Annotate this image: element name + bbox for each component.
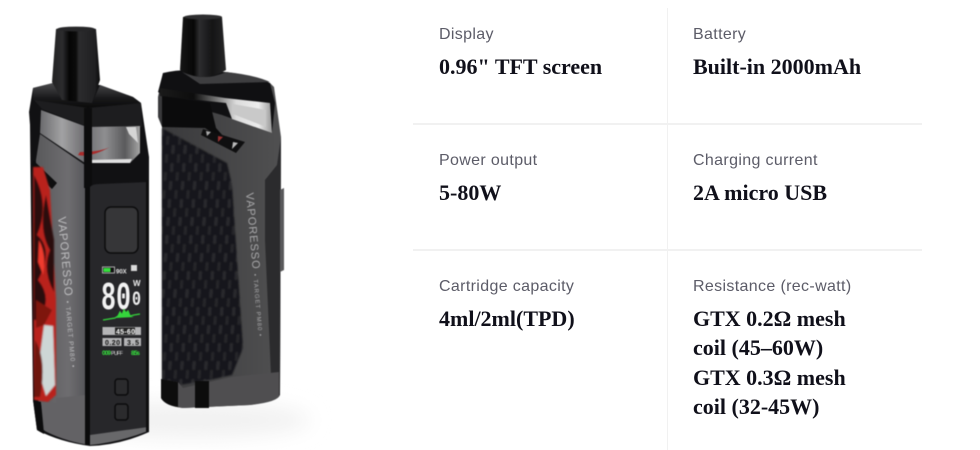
spec: charging current	[693, 152, 827, 205]
front body	[29, 83, 149, 446]
rear base	[161, 372, 279, 408]
rear shoulder	[158, 70, 275, 133]
value	[693, 306, 846, 419]
battery icon	[102, 267, 114, 273]
screen readout: 3.5	[127, 340, 139, 347]
rear carbon panel	[162, 128, 243, 385]
device: front pod with screen	[29, 27, 149, 446]
value: Built-in 2000mAh	[693, 54, 861, 79]
power range bar	[102, 327, 141, 335]
screen readout: W	[133, 279, 141, 288]
rear window	[160, 88, 272, 133]
screen readout: 90X	[116, 270, 127, 276]
product illustration: two pod devices	[28, 14, 294, 447]
screen readout: 0.20	[105, 340, 120, 347]
wattage digits: 80	[101, 277, 131, 322]
front shoulder cap	[33, 83, 141, 108]
value: GTX 0.3Ω mesh	[693, 365, 846, 390]
value: 5-80W	[439, 180, 501, 205]
spec: cartridge capacity	[439, 278, 575, 331]
rear vents	[201, 129, 245, 153]
adjust buttons	[115, 379, 128, 420]
value: GTX 0.2Ω mesh	[693, 306, 846, 331]
screen readout: 45-60	[116, 329, 135, 336]
device: rear pod with carbon panel	[158, 14, 284, 408]
spec: power output	[439, 152, 537, 205]
screen readout: 0	[132, 289, 141, 312]
label: Display	[439, 26, 494, 43]
label: Charging current	[693, 152, 818, 169]
value: coil (45–60W)	[693, 335, 823, 360]
value: 2A micro USB	[693, 180, 827, 205]
screen readout: PUFF	[111, 351, 124, 357]
puff counter: 009	[102, 350, 111, 357]
front display fascia	[90, 182, 148, 440]
front vents	[31, 160, 57, 189]
rear side strip	[265, 137, 281, 398]
spec: display	[439, 26, 602, 79]
front red resin panel	[33, 167, 56, 402]
front brand text: VAPORESSO • TARGET PM80 •	[55, 216, 80, 369]
screen readout: 8.5s	[131, 350, 140, 357]
green waveform	[103, 310, 140, 320]
spec: battery	[693, 26, 861, 79]
label: Power output	[439, 152, 537, 169]
rear brand text: VAPORESSO • TARGET PM80 •	[243, 192, 268, 338]
front grey side	[36, 134, 90, 445]
square fire button	[105, 207, 138, 253]
front mouthpiece	[52, 27, 100, 103]
label: Resistance (rec-watt)	[693, 278, 852, 295]
label: Cartridge capacity	[439, 278, 574, 295]
rear body	[158, 73, 281, 408]
floor shadow	[70, 402, 310, 438]
rear mouthpiece	[180, 15, 226, 77]
value: coil (32-45W)	[693, 394, 819, 419]
front base	[33, 400, 44, 434]
front window	[40, 110, 140, 163]
label: Battery	[693, 26, 746, 43]
spec: resistance	[693, 278, 852, 419]
value: 0.96" TFT screen	[439, 54, 602, 79]
value: 4ml/2ml(TPD)	[439, 306, 575, 331]
screen readout	[101, 265, 141, 357]
coil and time bar	[102, 338, 122, 346]
